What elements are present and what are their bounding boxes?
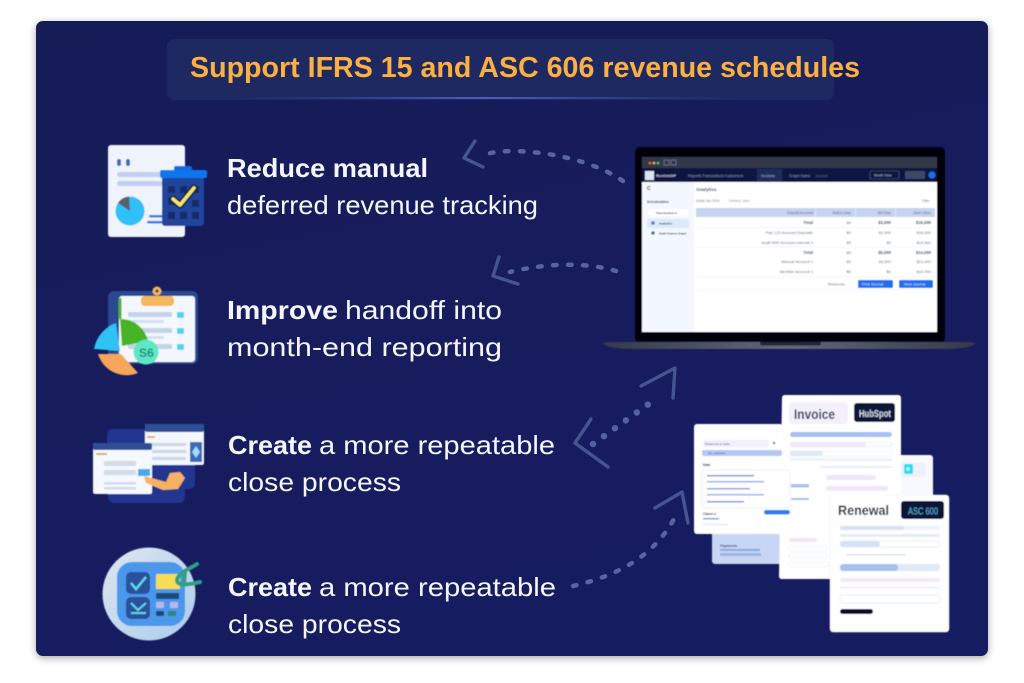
sidebar: Amortization A bbox=[656, 211, 678, 215]
invoice document: HubSpot bbox=[859, 408, 891, 420]
sidebar bbox=[642, 182, 694, 332]
schedule table: Next Journal bbox=[904, 282, 925, 286]
icon: round task tiles with green check bbox=[102, 548, 200, 640]
schedule table bbox=[696, 187, 935, 290]
text: create repeatable close process second bbox=[228, 572, 556, 639]
title banner bbox=[167, 39, 860, 100]
app navigation bar: Invoices bbox=[761, 174, 775, 178]
documents stack bbox=[694, 395, 949, 632]
sidebar: Analytics bbox=[659, 222, 673, 226]
schedule table: Analytics bbox=[696, 187, 717, 192]
icon: clipboard with pie chart: S6 bbox=[139, 346, 154, 360]
title banner: Support IFRS 15 and ASC 606 revenue schedules bbox=[190, 52, 860, 84]
schedule table: Total bbox=[803, 250, 813, 255]
schedule table: Delivery Jobs bbox=[729, 199, 750, 203]
text: improve handoff: handoff into bbox=[345, 295, 502, 325]
schedule table: $5,500 bbox=[878, 250, 892, 255]
schedule table: $13,000 bbox=[917, 259, 932, 264]
text: create repeatable close process bbox=[228, 430, 555, 497]
text: improve handoff: month-end reporting bbox=[227, 332, 502, 362]
text: improve handoff bbox=[227, 295, 502, 362]
back document right bbox=[880, 455, 933, 525]
schedule table: Bill Date bbox=[878, 211, 891, 215]
laptop with revenue schedule screen bbox=[603, 147, 975, 349]
schedule table: $0 bbox=[887, 240, 892, 245]
icon: clipboard with pie chart bbox=[94, 286, 198, 375]
renewal document: ASC 600 bbox=[908, 506, 938, 518]
text: improve handoff: Improve bbox=[227, 295, 338, 325]
schedule table: $5 bbox=[847, 250, 852, 255]
text: create repeatable close process second: a more repeatable bbox=[319, 572, 556, 602]
schedule table: $5 bbox=[847, 220, 852, 225]
schedule table: $16,000 bbox=[917, 230, 932, 235]
sidebar: C bbox=[647, 186, 651, 192]
schedule table: Manual Account 1 bbox=[781, 259, 814, 264]
text: reduce manual bbox=[227, 153, 538, 220]
schedule table: $0 bbox=[887, 269, 892, 274]
schedule table: $16,500 bbox=[916, 220, 932, 225]
arrow: laptop to first item bbox=[464, 141, 623, 181]
app navigation bar: RevlinkGP bbox=[656, 173, 676, 178]
app navigation bar: Journal bbox=[815, 174, 828, 178]
schedule table: Audit With Accrued Interest 2 bbox=[761, 240, 814, 245]
text: create repeatable close process second: Create bbox=[228, 572, 312, 602]
text: create repeatable close process second: close process bbox=[228, 609, 401, 639]
back document lower left: Payments bbox=[720, 544, 737, 548]
schedule table: Deposit Account bbox=[787, 211, 813, 215]
icon: report with calendar check bbox=[108, 145, 207, 237]
sidebar: Staff Finance Graph bbox=[659, 232, 687, 236]
schedule table: Start Value bbox=[913, 211, 931, 215]
renewal document: Renewal bbox=[838, 502, 889, 518]
left statement document: Please list of tasks bbox=[705, 442, 730, 446]
laptop base bbox=[603, 342, 975, 349]
schedule table: $3,500 bbox=[879, 259, 892, 264]
arrow: last item to documents bbox=[573, 492, 688, 586]
left statement document bbox=[694, 424, 790, 534]
text: reduce manual: Reduce manual bbox=[227, 153, 428, 183]
left statement document: Cases n bbox=[703, 512, 716, 516]
text: create repeatable close process: close process bbox=[228, 467, 401, 497]
schedule table: Status Date bbox=[832, 211, 851, 215]
browser title bar bbox=[642, 157, 937, 168]
schedule table: $5 bbox=[847, 240, 852, 245]
back document lower left bbox=[712, 520, 792, 564]
schedule table: Member Account 1 bbox=[780, 269, 814, 274]
schedule table: Print Journal bbox=[862, 282, 883, 286]
invoice document bbox=[779, 395, 901, 579]
renewal document bbox=[830, 495, 949, 632]
schedule table: Filter bbox=[922, 199, 930, 203]
text: reduce manual: deferred revenue tracking bbox=[227, 190, 538, 220]
schedule table: $2,500 bbox=[879, 230, 892, 235]
arrow: double-headed between documents and list bbox=[575, 368, 675, 467]
left statement document: Date bbox=[703, 463, 710, 467]
schedule table: $0 bbox=[847, 230, 852, 235]
app navigation bar: Reports Transactions Customers bbox=[688, 174, 743, 178]
schedule table: $3,500 bbox=[878, 220, 892, 225]
arrow: laptop to second item bbox=[493, 257, 616, 284]
text: create repeatable close process: a more repeatable bbox=[319, 430, 555, 460]
schedule table: Total bbox=[803, 220, 813, 225]
app navigation bar: Graph Sales bbox=[789, 174, 810, 178]
app navigation bar bbox=[642, 168, 937, 182]
schedule table: Reserves bbox=[828, 282, 845, 286]
invoice document: Invoice bbox=[794, 406, 835, 422]
schedule table: $5 bbox=[847, 269, 852, 274]
schedule table: $14,000 bbox=[916, 250, 932, 255]
schedule table: $15,500 bbox=[917, 240, 932, 245]
left statement document: Acc. payment bbox=[708, 451, 725, 455]
schedule table: Detail Jan 2024 bbox=[696, 199, 720, 203]
sidebar: Schedulables bbox=[647, 200, 669, 204]
schedule table: $5 bbox=[847, 259, 852, 264]
schedule table: Part 120 Accrued Deposits bbox=[766, 230, 813, 235]
schedule table: $16,000 bbox=[917, 269, 932, 274]
text: create repeatable close process: Create bbox=[228, 430, 312, 460]
app navigation bar: Month View bbox=[874, 174, 892, 178]
icon: two windows with hand bbox=[93, 424, 204, 503]
